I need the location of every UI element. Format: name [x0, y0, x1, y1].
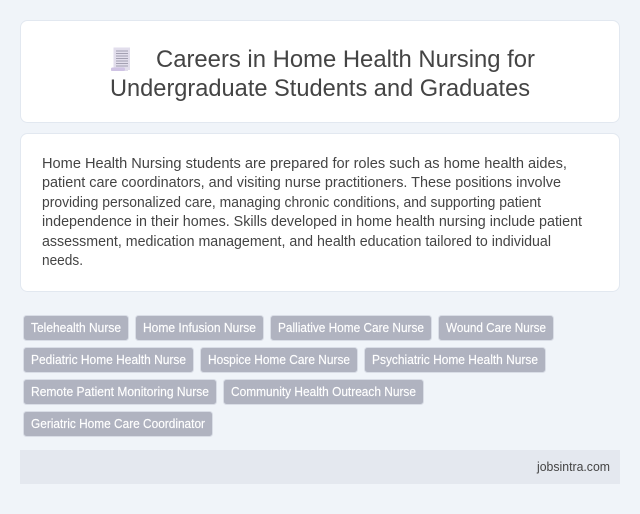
- tag: Pediatric Home Health Nurse: [24, 348, 194, 372]
- description text: providing personalized care, managing chronic conditions, and supporting patient: [42, 195, 541, 211]
- tag: Palliative Home Care Nurse: Palliative Home Care Nurse: [278, 321, 424, 335]
- tag: Geriatric Home Care Coordinator: [24, 412, 212, 436]
- panel: description card: [20, 134, 620, 292]
- tag: Telehealth Nurse: Telehealth Nurse: [31, 321, 121, 335]
- description text: needs.: [42, 253, 83, 269]
- title text: Undergraduate Students and Graduates: [110, 75, 530, 102]
- tag: Geriatric Home Care Coordinator: Geriatric Home Care Coordinator: [31, 417, 205, 431]
- tag: Palliative Home Care Nurse: [270, 316, 432, 340]
- tag: Psychiatric Home Health Nurse: Psychiatric Home Health Nurse: [372, 353, 538, 367]
- tag: Telehealth Nurse: [24, 316, 128, 340]
- description text: assessment, medication management, and health education tailored to individual: [42, 234, 551, 250]
- tag: Wound Care Nurse: [438, 316, 554, 340]
- tag: Wound Care Nurse: Wound Care Nurse: [446, 321, 546, 335]
- tag: Home Infusion Nurse: [136, 316, 264, 340]
- icon: document scroll: [111, 48, 130, 71]
- title text: [110, 46, 535, 102]
- tag: Remote Patient Monitoring Nurse: [24, 380, 216, 404]
- title text: Careers in Home Health Nursing for: [156, 46, 535, 73]
- tag: Hospice Home Care Nurse: [200, 348, 358, 372]
- panel: title card: [20, 20, 620, 122]
- footer bar: [20, 450, 620, 484]
- tag: Psychiatric Home Health Nurse: [364, 348, 546, 372]
- description text: patient care coordinators, and visiting nurse practitioners. These positions involve: [42, 175, 561, 191]
- description text: [42, 156, 582, 269]
- description text: independence in their homes. Skills developed in home health nursing include patient: [42, 214, 582, 230]
- tag: Pediatric Home Health Nurse: Pediatric Home Health Nurse: [31, 353, 186, 367]
- tag: Remote Patient Monitoring Nurse: Remote Patient Monitoring Nurse: [31, 385, 209, 399]
- footer source text: jobsintra.com: [536, 460, 610, 474]
- tag: Home Infusion Nurse: Home Infusion Nurse: [143, 321, 256, 335]
- tag list: [24, 316, 554, 436]
- tag: Community Health Outreach Nurse: Community Health Outreach Nurse: [231, 385, 416, 399]
- tag: Hospice Home Care Nurse: Hospice Home Care Nurse: [208, 353, 350, 367]
- description text: Home Health Nursing students are prepared for roles such as home health aides,: [42, 156, 567, 172]
- tag: Community Health Outreach Nurse: [224, 380, 424, 404]
